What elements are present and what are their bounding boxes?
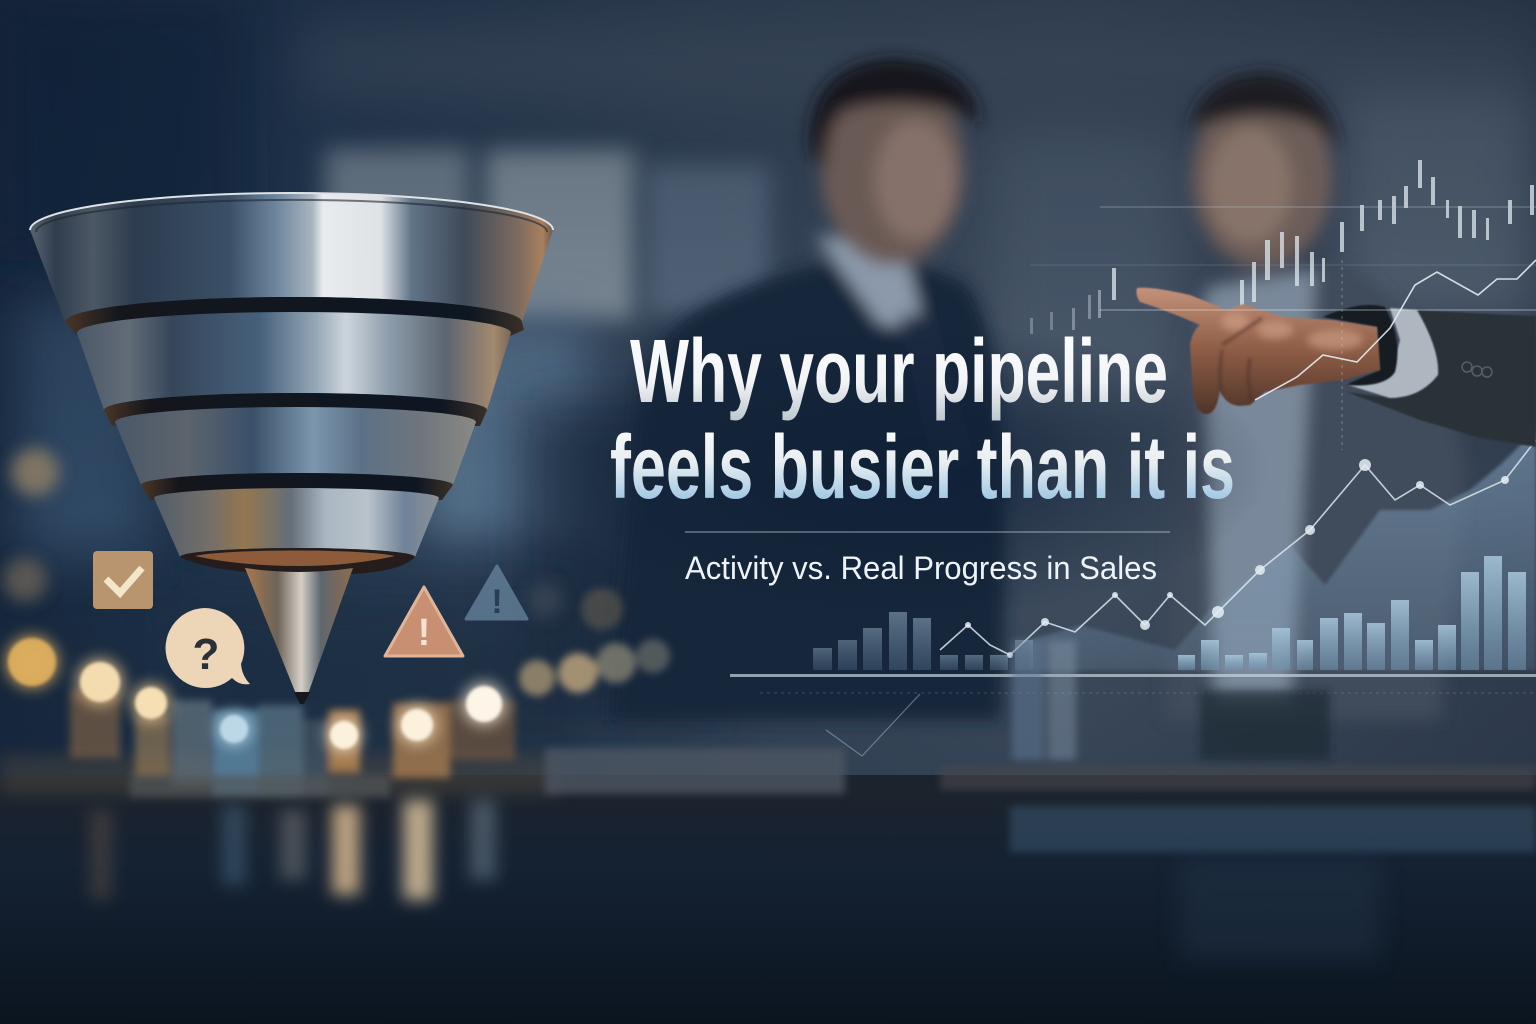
icon: warning triangle blue xyxy=(466,566,527,621)
horizontal chart baseline xyxy=(730,674,1536,855)
funnel spout xyxy=(245,568,353,694)
funnel gap three xyxy=(141,473,453,500)
upper trend line xyxy=(1100,260,1536,450)
wrist watch xyxy=(1323,305,1397,385)
hand xyxy=(1136,288,1380,414)
bar chart xyxy=(813,556,1526,670)
suit sleeve xyxy=(1347,310,1536,447)
icon: question bubble xyxy=(166,608,250,688)
small lower-left trend line xyxy=(826,694,920,756)
funnel fourth band xyxy=(154,488,439,557)
funnel gap two xyxy=(104,393,487,426)
table surface xyxy=(0,748,1536,1024)
title xyxy=(610,322,1235,518)
shirt cuff xyxy=(1345,308,1438,398)
blurred businessman, right xyxy=(1165,72,1465,720)
icon: warning triangle orange: ! xyxy=(418,612,430,654)
funnel second band xyxy=(77,312,511,410)
funnel gap one xyxy=(65,297,524,336)
icon: warning triangle blue: ! xyxy=(491,583,503,621)
dark veil behind title xyxy=(530,320,1270,620)
funnel third band xyxy=(115,407,476,485)
bokeh lights xyxy=(3,448,670,753)
funnel rim highlight xyxy=(30,193,553,230)
upper grid lines xyxy=(1030,207,1536,265)
icon: warning triangle orange xyxy=(385,587,463,656)
funnel base collar xyxy=(180,548,415,575)
knuckle highlights xyxy=(1221,313,1363,350)
funnel xyxy=(30,193,553,704)
blurred businessman, left xyxy=(610,58,1005,720)
finger creases xyxy=(1220,318,1262,402)
blurred coloured blocks under funnel xyxy=(70,690,515,797)
blurred light reflections on table xyxy=(90,800,496,900)
title line 2: feels busier than it is xyxy=(610,418,1235,518)
area chart fill xyxy=(1030,430,1536,670)
icon: question bubble: ? xyxy=(193,630,219,679)
subtitle: Activity vs. Real Progress in Sales xyxy=(685,550,1157,586)
candlestick chart xyxy=(1030,160,1534,334)
icon: check box xyxy=(93,551,153,609)
title line 1: Why your pipeline xyxy=(630,322,1168,422)
blurred lower chart columns xyxy=(1012,640,1330,760)
funnel spout tip xyxy=(294,692,310,704)
sleeve buttons xyxy=(1462,362,1492,377)
divider under title xyxy=(685,531,1170,533)
pointing hand and sleeve xyxy=(1136,288,1536,447)
funnel top band xyxy=(30,193,553,322)
line chart with markers xyxy=(940,440,1536,658)
